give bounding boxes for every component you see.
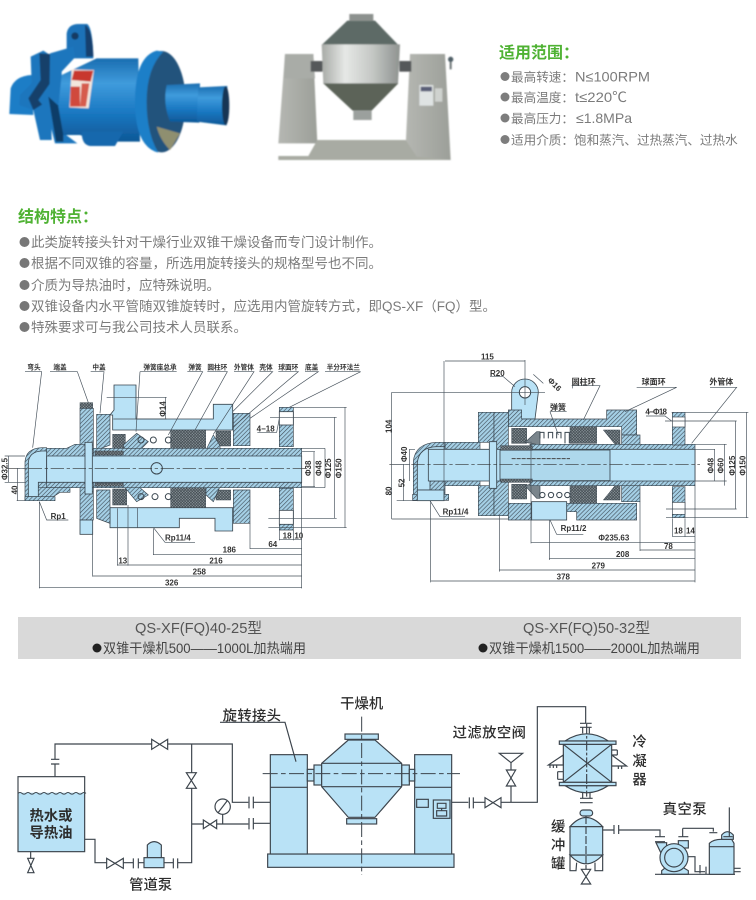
dimension numbers: Φ14 [159,401,168,417]
leader: rotary joint [220,722,296,762]
dimension numbers: Φ48 [706,457,715,473]
dimension numbers: Φ60 [716,457,725,473]
buffer tank [570,810,603,884]
caption: QS-XF(FQ)50-32: 双锥干燥机1500——2000L加热端用 [489,641,700,656]
hot side piping and valves [28,739,270,873]
caption: QS-XF(FQ)40-25 [92,620,306,656]
dimension numbers: 40 [10,485,19,494]
dimension numbers: Φ125 [728,455,737,476]
list: application parameters: N≤100RPM [575,68,650,84]
dimension numbers: Φ235.63 [598,533,630,542]
list: feature bullets: 此类旋转接头针对干燥行业双锥干燥设备而专门设计制作。 [31,234,382,250]
list: feature bullets: 特殊要求可与我公司技术人员联系。 [31,320,247,335]
list: application parameters: t≤220℃ [575,89,627,105]
model caption band [18,617,741,659]
dimension numbers: 10 [294,531,304,540]
heading: application range: 适用范围： [499,44,579,62]
dimension numbers: 216 [209,557,223,566]
vacuum side of schematic [452,707,741,884]
list: application parameters [500,68,738,148]
dimension numbers: 186 [223,546,237,555]
dimension numbers: 378 [557,573,571,582]
part name labels: 外管体 [234,363,254,372]
caption: QS-XF(FQ)50-32 [478,620,700,656]
part name labels: 球面环 [278,363,299,372]
diagram: QS-XF(FQ)50-32 cross section [385,353,748,582]
dimension numbers: 326 [165,579,179,588]
dryer machine [263,717,460,875]
part name labels: 端盖 [53,363,67,372]
dimension numbers: 18 [674,527,683,536]
label: condenser: 器 [632,772,647,789]
part name labels: 弹簧座总承 [143,363,177,372]
part name labels: 底盖 [305,363,319,372]
caption: QS-XF(FQ)40-25: QS-XF(FQ)40-25型 [135,620,262,637]
dimension numbers: Φ40 [400,446,409,462]
dimension numbers: Φ48 [315,460,324,476]
photo: double-cone dryer machine [278,14,453,160]
caption: QS-XF(FQ)40-25: 双锥干燥机500——1000L加热端用 [103,641,306,656]
dimension numbers: Rp1 [51,512,66,521]
dimension numbers: 208 [616,550,630,559]
part name labels: 圆柱环 [572,376,596,386]
dimension numbers [385,353,747,582]
dimension numbers: 4−Φ18 [645,407,668,416]
label: dryer: 干燥机 [340,696,384,713]
dimension numbers: 80 [385,486,394,495]
dimension numbers: Rp11/4 [165,533,191,542]
list: application parameters: 最高转速： [511,70,574,84]
label: filter vent valve: 过滤放空阀 [453,723,526,741]
list: feature bullets: 双锥设备内水平管随双锥旋转时，应选用内管旋转方式，即QS-XF（FQ）型。 [31,298,496,314]
part name labels: 弯头 [27,363,41,372]
dimension numbers: 18 [283,531,292,540]
vacuum pump unit [603,807,741,874]
dimension numbers: Φ16 [546,376,563,394]
process flow schematic [18,696,460,893]
dimension numbers: 4−18 [257,425,275,434]
dimension numbers: 279 [592,562,606,571]
dimension numbers: 64 [268,540,278,549]
leader and dimension lines [392,360,748,582]
drawing body: left section [7,385,308,534]
list: feature bullets: 介质为导热油时，应特殊说明。 [31,277,220,293]
list: application parameters: 最高压力： [511,111,574,126]
dimension numbers: 52 [397,478,406,487]
dimension numbers: Φ150 [738,455,747,476]
diagram: QS-XF(FQ)40-25 cross section [0,363,361,588]
drawing body: right section [389,379,700,520]
pipeline pump [144,842,164,868]
label: pipeline pump: 管道泵 [129,875,172,893]
label: vacuum pump: 真空泵 [663,800,707,818]
list: application parameters: 最高温度： [511,90,574,105]
part name labels: 圆柱环 [207,363,228,372]
dimension numbers: 258 [193,567,207,576]
list: application parameters: ≤1.8MPa [576,110,632,126]
part name labels [27,363,360,372]
photo: blue rotary joint [9,24,229,153]
vent piping and valves [452,707,592,808]
dimension numbers: 115 [481,353,494,362]
part name labels [550,376,733,412]
condenser [548,724,627,803]
caption: QS-XF(FQ)50-32: QS-XF(FQ)50-32型 [523,620,650,637]
label: condenser [632,734,647,789]
label: buffer tank: 冲 [551,837,565,854]
part name labels: 弹簧 [188,363,202,372]
label: buffer tank: 缓 [551,819,566,836]
dimension numbers: 78 [664,542,673,551]
label: buffer tank [551,819,566,872]
panel: application range [499,44,738,148]
dimension numbers: 14 [686,527,695,536]
dimension numbers: Φ150 [335,458,344,478]
dimension numbers: Φ32.5 [0,457,9,480]
hot oil tank [18,777,86,852]
dimension numbers: 104 [385,419,394,433]
dimension numbers: Rp11/2 [561,524,587,533]
list: application parameters: 适用介质：饱和蒸汽、过热蒸汽、过热水 [511,134,738,148]
label: buffer tank: 罐 [551,855,565,872]
part name labels: 外管体 [709,376,733,386]
part name labels: 半分环法兰 [327,363,360,372]
label: condenser: 冷 [632,734,647,751]
hot oil tank: 导热油 [29,825,72,842]
part name labels: 中盖 [92,363,106,372]
label: rotary joint: 旋转接头 [223,708,281,725]
heading: structural features: 结构特点： [18,207,98,226]
label: condenser: 凝 [632,753,647,770]
dimension numbers: Rp11/4 [443,507,469,516]
leader and dimension lines [5,372,361,588]
part name labels: 球面环 [642,376,666,386]
dimension numbers: Φ38 [304,460,313,476]
list: feature bullets [20,234,496,335]
dimension numbers: R20 [490,369,505,378]
dimension numbers: Φ125 [324,458,333,478]
list: feature bullets: 根据不同双锥的容量，所选用旋转接头的规格型号也不同。 [31,255,382,271]
panel: structural features [18,207,496,335]
part name labels: 弹簧 [550,402,566,412]
dimension numbers [0,401,344,588]
dimension numbers: 13 [118,557,128,566]
part name labels: 壳体 [259,363,273,372]
hot oil tank: 热水或 [29,806,72,824]
